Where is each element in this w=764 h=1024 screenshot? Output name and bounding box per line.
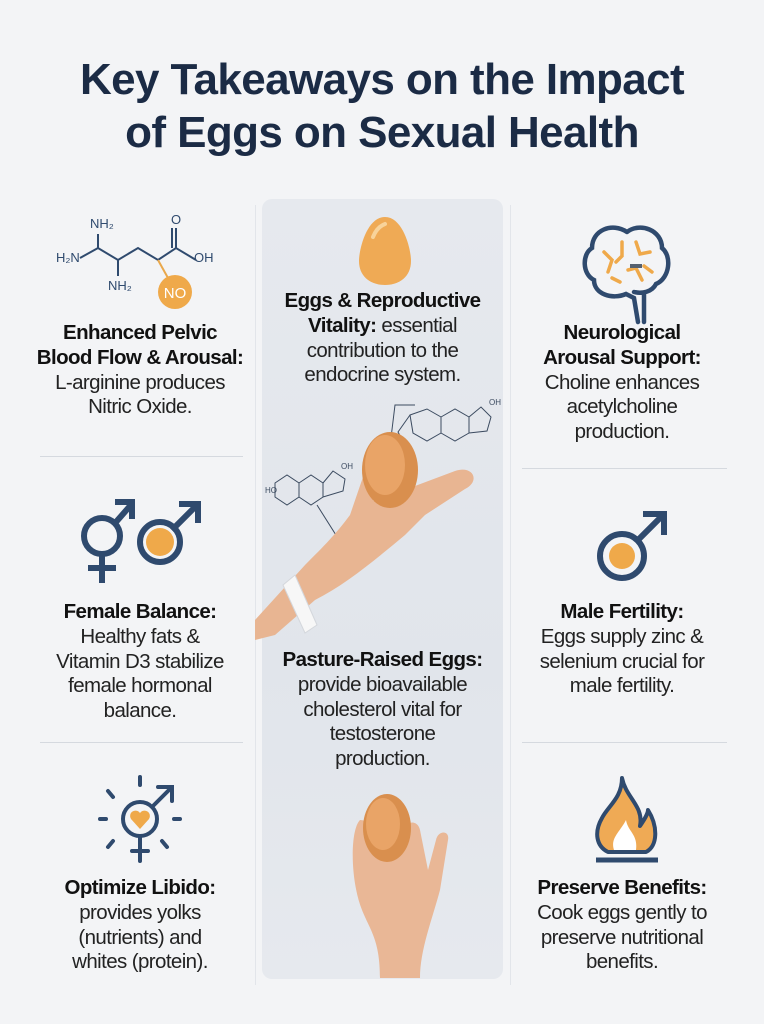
- text: neurological arousal: production.: [575, 420, 669, 443]
- text: female balance: [56, 600, 224, 722]
- image: hand holding egg with molecules: O: [396, 440, 402, 449]
- text: neurological arousal: acetylcholine: [567, 395, 677, 418]
- text: neurological arousal: Arousal Support:: [543, 346, 701, 369]
- text: female balance: Healthy fats &: [80, 625, 200, 648]
- text: preserve benefits: Preserve Benefits:: [537, 876, 707, 899]
- image: hand holding egg with molecules: OH: [489, 398, 501, 407]
- text: optimize libido: (nutrients) and: [78, 926, 202, 949]
- icon: L-arginine molecule: OH: [194, 250, 214, 265]
- icon: female/male symbols: [81, 499, 201, 583]
- text: neurological arousal: Neurological: [564, 321, 680, 344]
- title: of Eggs on Sexual Health: [125, 108, 639, 157]
- icon: male symbol: [597, 511, 667, 581]
- text: female balance: female hormonal: [68, 674, 212, 697]
- text: female balance: balance.: [104, 699, 176, 722]
- text: optimize libido: [65, 876, 215, 973]
- text: pasture raised eggs: production.: [335, 747, 430, 770]
- image: hand holding egg with molecules: [255, 398, 501, 640]
- icon: L-arginine molecule: NH₂: [90, 216, 114, 231]
- icon: flame: [595, 776, 658, 862]
- text: neurological arousal: Choline enhances: [545, 371, 699, 394]
- text: male fertility: Eggs supply zinc &: [541, 625, 703, 648]
- image: hand holding egg with molecules: OH: [341, 462, 353, 471]
- text: pasture raised eggs: cholesterol vital for: [303, 698, 462, 721]
- text: preserve benefits: benefits.: [586, 950, 658, 973]
- text: pelvic blood flow: Blood Flow & Arousal:: [37, 346, 243, 369]
- icon: L-arginine molecule: H₂N: [56, 250, 80, 265]
- text: pelvic blood flow: Nitric Oxide.: [88, 395, 192, 418]
- icon: libido symbol: [98, 775, 182, 863]
- text: pasture raised eggs: provide bioavailable: [298, 673, 467, 696]
- text: reproductive vitality: endocrine system.: [304, 363, 461, 386]
- text: female balance: Vitamin D3 stabilize: [56, 650, 224, 673]
- text: pelvic blood flow: [37, 321, 243, 418]
- icon: egg top: [359, 217, 411, 285]
- text: female balance: Female Balance:: [64, 600, 216, 623]
- image: hand holding egg bottom: [352, 794, 448, 978]
- text: pasture raised eggs: testosterone: [330, 722, 435, 745]
- text: male fertility: selenium crucial for: [540, 650, 704, 673]
- text: optimize libido: whites (protein).: [72, 950, 208, 973]
- icon: L-arginine molecule: O: [171, 212, 181, 227]
- icon: L-arginine molecule: NH₂: [108, 278, 132, 293]
- text: pelvic blood flow: L-arginine produces: [55, 371, 225, 394]
- icon: L-arginine molecule: [56, 212, 214, 309]
- text: male fertility: [540, 600, 705, 697]
- text: preserve benefits: [537, 876, 707, 973]
- icon: L-arginine molecule: NO: [164, 285, 186, 302]
- panel: center column: [262, 199, 503, 979]
- title: Key Takeaways on the Impact: [80, 55, 684, 104]
- text: reproductive vitality: Eggs & Reproductive: [285, 289, 480, 312]
- text: pelvic blood flow: Enhanced Pelvic: [63, 321, 217, 344]
- text: pasture raised eggs: [283, 648, 482, 770]
- text: neurological arousal: [543, 321, 701, 443]
- text: optimize libido: provides yolks: [79, 901, 201, 924]
- image: hand holding egg with molecules: HO: [265, 486, 277, 495]
- icon: brain: [582, 225, 670, 324]
- text: reproductive vitality: contribution to the: [307, 339, 458, 362]
- text: reproductive vitality: [285, 289, 480, 386]
- text: pasture raised eggs: Pasture-Raised Eggs:: [283, 648, 482, 671]
- text: male fertility: male fertility.: [570, 674, 674, 697]
- text: reproductive vitality: Vitality: essential: [308, 314, 457, 337]
- title: [80, 55, 684, 157]
- text: male fertility: Male Fertility:: [560, 600, 684, 623]
- text: optimize libido: Optimize Libido:: [65, 876, 215, 899]
- text: preserve benefits: Cook eggs gently to: [537, 901, 707, 924]
- text: preserve benefits: preserve nutritional: [541, 926, 703, 949]
